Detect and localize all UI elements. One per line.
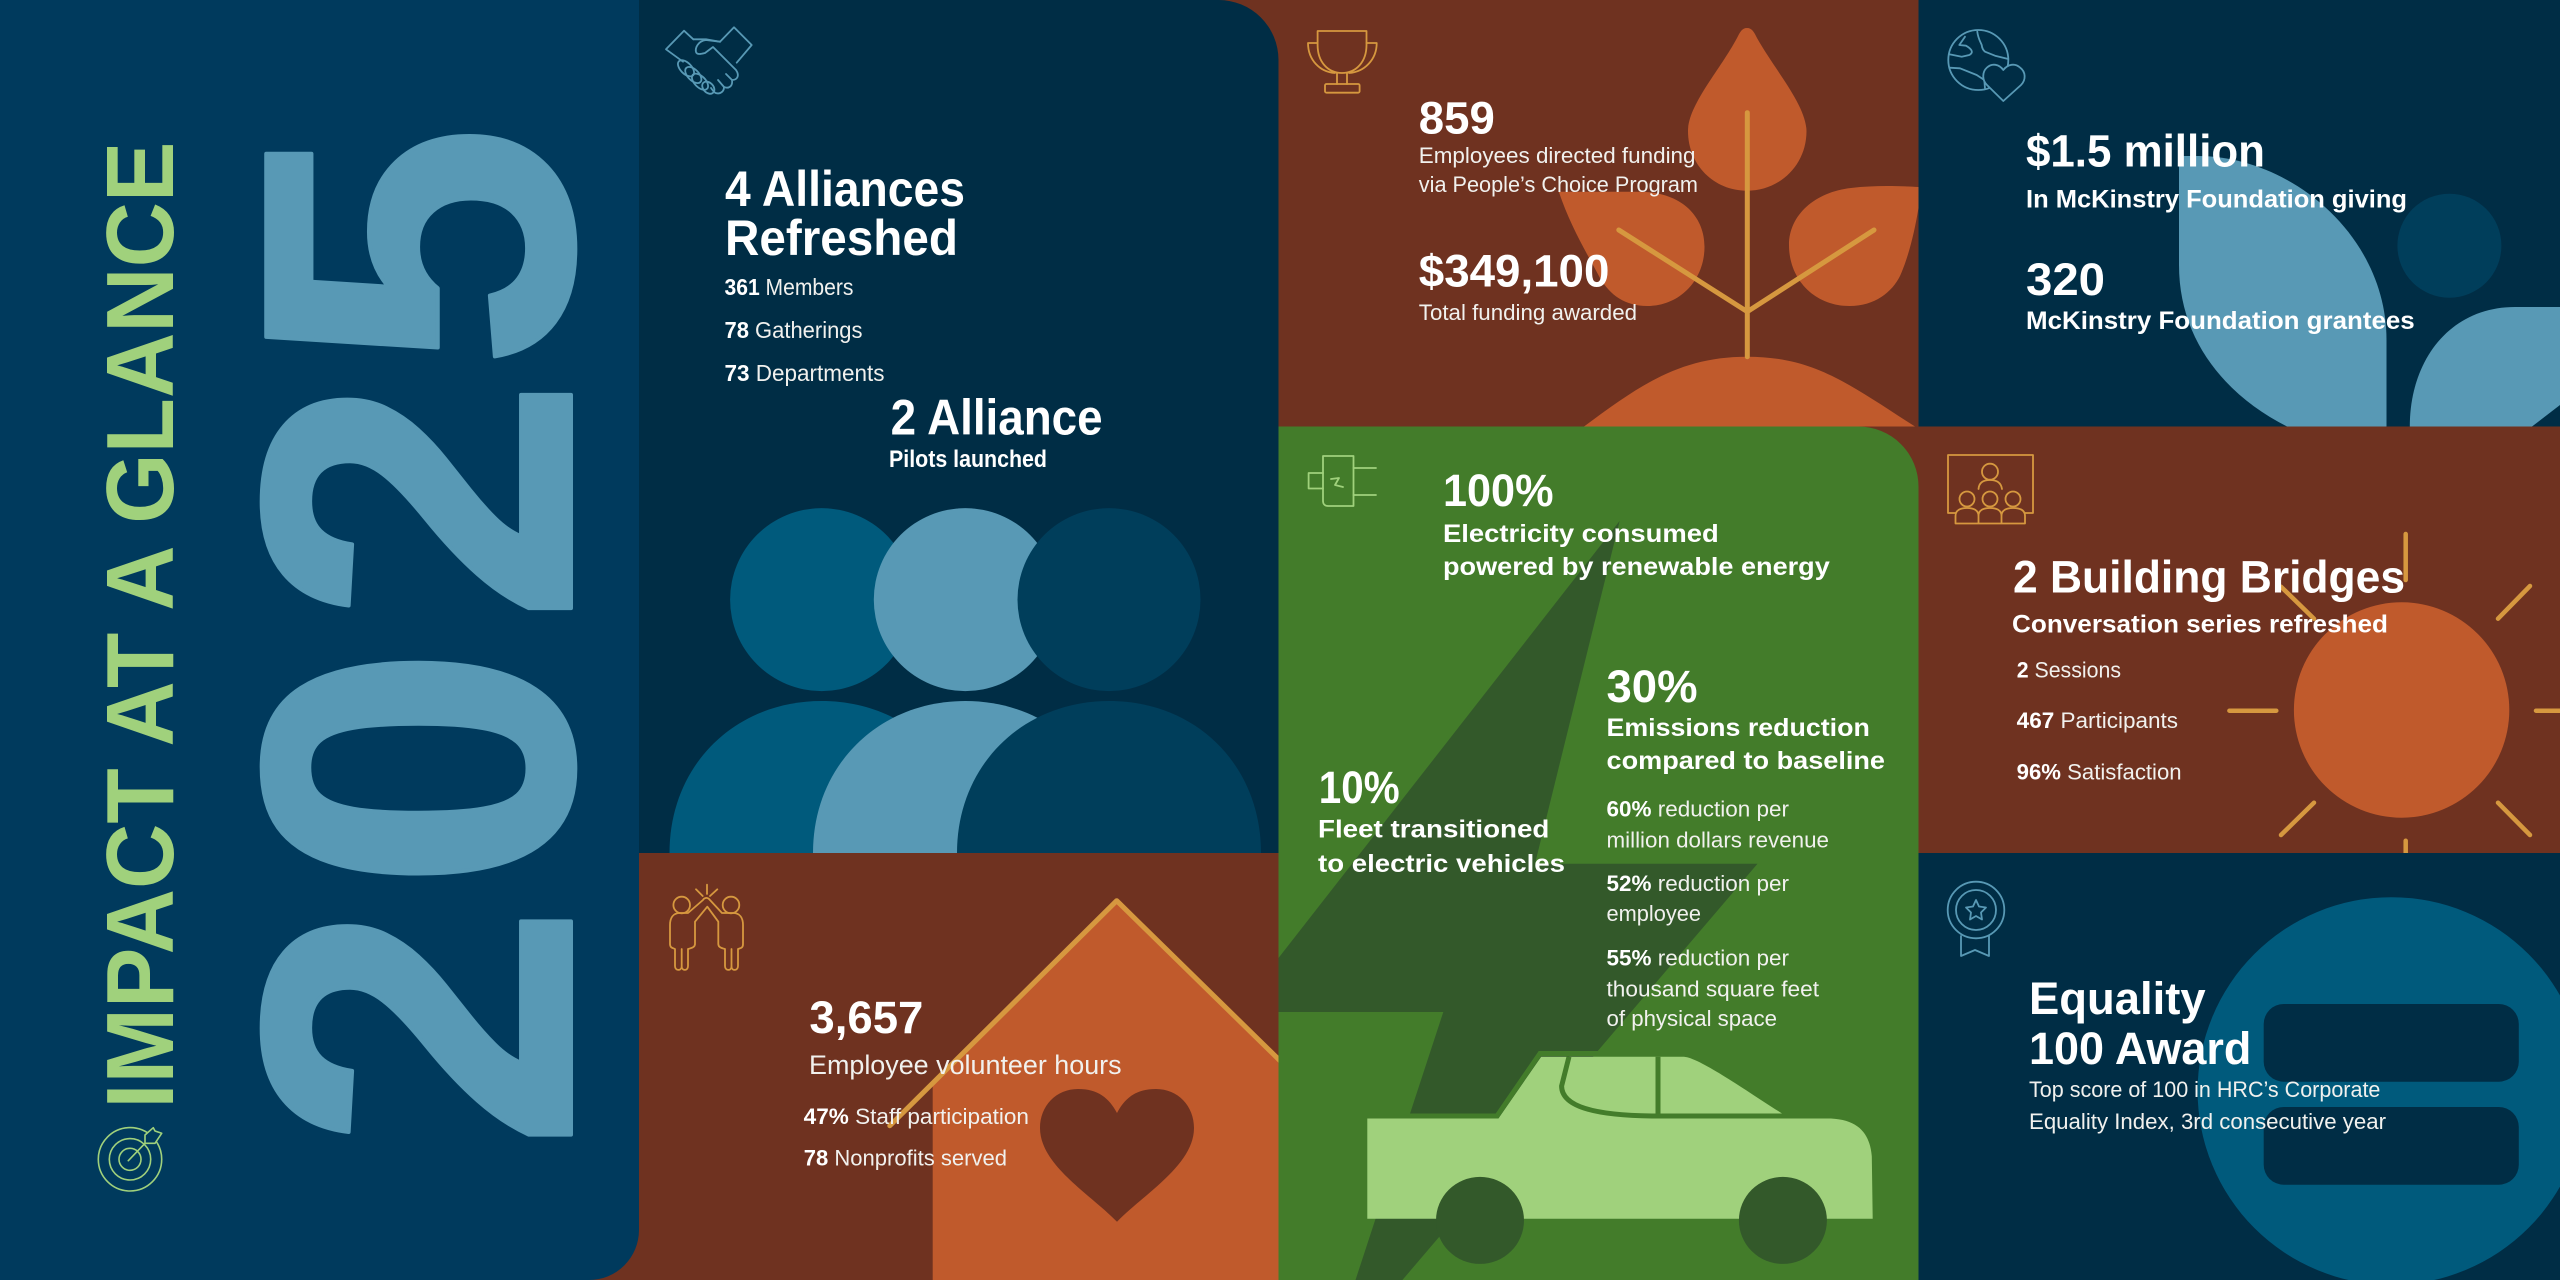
text: emissions reduction — [1606, 661, 1885, 1031]
text: equality award: Equality Index, 3rd consecutive year — [2029, 1109, 2386, 1134]
illustration: foundation leaves — [2179, 156, 2560, 426]
text: volunteer hours: 78 Nonprofits served — [804, 1146, 1007, 1171]
icon: high five — [670, 885, 743, 970]
text: employee funding: 859 — [1419, 92, 1495, 143]
illustration: house with heart — [890, 901, 1280, 1280]
text: emissions reduction: 52% reduction per — [1606, 871, 1789, 896]
text: foundation giving: $1.5 million — [2026, 126, 2265, 177]
panel: equality award — [1918, 853, 2560, 1280]
text: emissions reduction: compared to baseline — [1606, 747, 1885, 775]
heading: impact at a glance: IMPACT AT A GLANCE — [87, 142, 194, 1109]
icon: audience — [1948, 455, 2033, 524]
text: renewable electricity: Electricity consumed — [1443, 520, 1719, 548]
text: equality award: Top score of 100 in HRC’s Corporate — [2029, 1077, 2380, 1102]
panel: employee funding — [1278, 0, 1918, 427]
text: employee funding: Total funding awarded — [1419, 300, 1637, 325]
text: renewable electricity: 100% — [1443, 465, 1554, 516]
text: renewable electricity — [1443, 465, 1830, 581]
text: emissions reduction: 55% reduction per — [1606, 946, 1789, 971]
text: alliance pilots: 2 Alliance — [891, 390, 1103, 446]
text: volunteer hours: 47% Staff participation — [804, 1104, 1029, 1129]
text: emissions reduction: employee — [1606, 901, 1701, 926]
text: volunteer hours — [804, 992, 1122, 1171]
text: foundation giving: In McKinstry Foundation giving — [2026, 186, 2407, 214]
text: emissions reduction: thousand square feet — [1606, 976, 1819, 1002]
panel: foundation giving — [1918, 0, 2560, 426]
text: employee funding: $349,100 — [1419, 246, 1609, 297]
text: building bridges: 96% Satisfaction — [2017, 759, 2182, 784]
panel: volunteer hours — [639, 853, 1280, 1280]
text: electric fleet: to electric vehicles — [1318, 850, 1565, 878]
icon: globe with heart — [1948, 30, 2025, 101]
panel: building bridges — [1918, 426, 2560, 853]
text: employee funding: via People’s Choice Program — [1419, 172, 1698, 197]
illustration: sun — [2229, 534, 2560, 853]
text: alliances refreshed — [724, 161, 965, 386]
text: building bridges: Conversation series refreshed — [2012, 611, 2388, 639]
text: foundation giving: McKinstry Foundation grantees — [2026, 307, 2415, 335]
text: emissions reduction: 30% — [1606, 661, 1698, 712]
text: building bridges: 467 Participants — [2017, 708, 2178, 733]
text: building bridges: 2 Building Bridges — [2013, 551, 2405, 602]
panel: title 2025 — [0, 0, 665, 1280]
text: alliances refreshed: 4 Alliances — [725, 161, 965, 217]
text: alliance pilots: Pilots launched — [889, 446, 1047, 473]
text: building bridges: 2 Sessions — [2017, 658, 2121, 683]
illustration: three people — [670, 508, 1261, 853]
text: employee funding — [1419, 92, 1698, 325]
icon: trophy — [1308, 31, 1377, 93]
text: alliance pilots — [889, 390, 1103, 473]
text: employee funding: Employees directed funding — [1419, 143, 1696, 168]
illustration: equals sign in circle — [2198, 897, 2560, 1280]
text: foundation giving — [2026, 126, 2415, 335]
panel: alliances — [639, 0, 1278, 853]
text: equality award: Equality — [2029, 973, 2206, 1024]
illustration: electric car — [1367, 1054, 1873, 1264]
text: alliances refreshed: 73 Departments — [724, 360, 884, 386]
text: alliances refreshed: 361 Members — [724, 274, 854, 300]
text: emissions reduction: million dollars revenue — [1606, 827, 1829, 852]
text: alliances refreshed: 78 Gatherings — [724, 317, 862, 343]
text: emissions reduction: of physical space — [1606, 1006, 1777, 1031]
text: alliances refreshed: Refreshed — [725, 210, 958, 266]
heading: year 2025: 2025 — [170, 124, 665, 1150]
text: emissions reduction: Emissions reduction — [1606, 714, 1870, 742]
text: electric fleet — [1318, 762, 1565, 878]
text: electric fleet: 10% — [1319, 762, 1400, 813]
text: volunteer hours: Employee volunteer hours — [809, 1050, 1122, 1080]
icon: medal — [1948, 882, 2004, 956]
text: building bridges — [2012, 551, 2405, 784]
illustration: lightning bolt — [1278, 521, 1758, 1280]
icon: target — [98, 1128, 162, 1191]
illustration: plant — [1559, 28, 1918, 426]
text: equality award: 100 Award — [2029, 1023, 2251, 1074]
text: renewable electricity: powered by renewable energy — [1443, 553, 1830, 581]
text: equality award — [2029, 973, 2386, 1134]
text: foundation giving: 320 — [2026, 254, 2105, 305]
text: volunteer hours: 3,657 — [809, 992, 923, 1043]
icon: handshake — [666, 27, 752, 96]
text: electric fleet: Fleet transitioned — [1318, 816, 1549, 844]
text: emissions reduction: 60% reduction per — [1606, 796, 1789, 822]
panel: sustainability — [1278, 426, 1919, 1280]
icon: plug — [1309, 456, 1376, 506]
